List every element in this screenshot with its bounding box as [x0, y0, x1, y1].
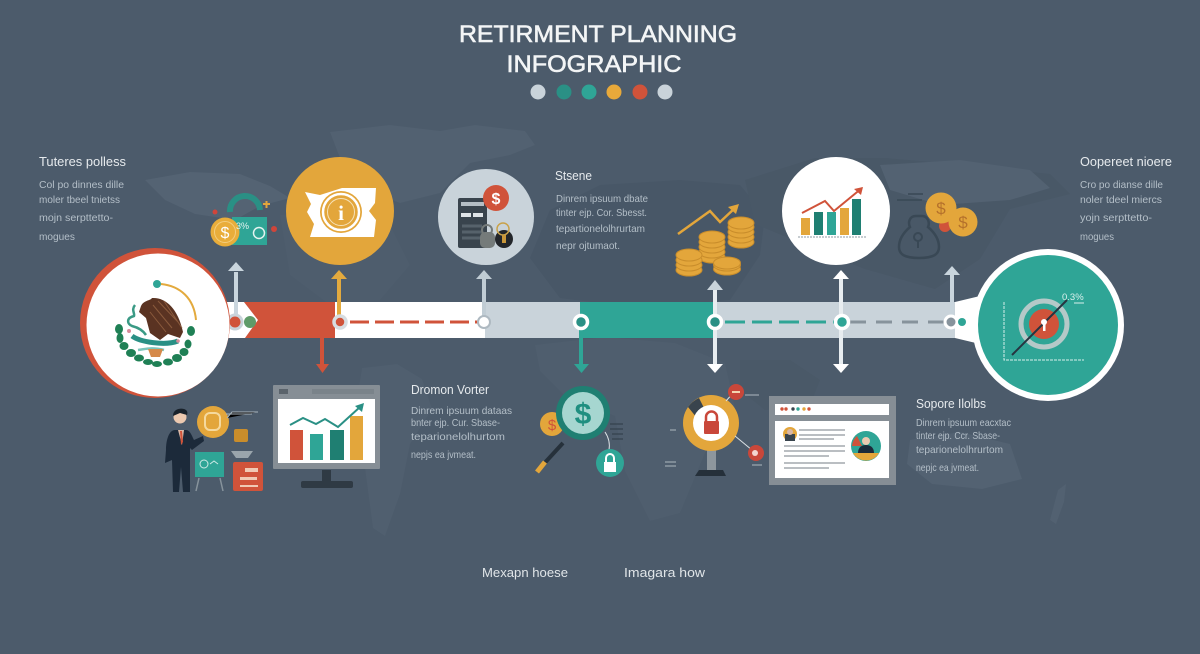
text block: top left — [39, 155, 126, 243]
text block: lower left: teparionelolhurtom — [411, 431, 505, 443]
teal target circle — [972, 249, 1124, 401]
text block: top middle: Dinrem ipsuum dbate — [556, 193, 648, 205]
text block: lower left: Dinrem ipsuum dataas — [411, 405, 512, 417]
text block: top middle: Stsene — [555, 169, 592, 183]
grey calculator circle: $ — [492, 191, 501, 208]
icon: money and gauge: 3% — [236, 221, 249, 231]
grey calculator circle — [438, 169, 534, 265]
text block: top right: Oopereet nioere — [1080, 155, 1172, 169]
orange info circle — [286, 157, 394, 265]
icon: money and gauge — [210, 196, 277, 246]
orange info circle: i — [338, 201, 344, 225]
icon: monitor with bar chart — [273, 385, 380, 488]
eagle — [139, 298, 183, 340]
text block: lower left: Dromon Vorter — [411, 383, 489, 397]
timeline band — [220, 296, 980, 344]
title colour dots — [530, 84, 672, 100]
text block: lower right: teparionelolhrurtom — [916, 444, 1003, 456]
icon: magnifier with lock: $ — [548, 417, 557, 434]
text block: top right: Cro po dianse dille — [1080, 179, 1163, 191]
title: INFOGRAPHIC — [506, 51, 682, 78]
text block: lower right: Sopore Ilolbs — [916, 397, 986, 411]
title: RETIRMENT PLANNING — [459, 21, 737, 48]
text block: lower right: Dinrem ipsuum eacxtac — [916, 417, 1011, 429]
text block: top left: mogues — [39, 231, 75, 243]
icon: padlock gauge on stand — [665, 384, 764, 476]
bottom labels: Mexapn hoese — [482, 566, 568, 580]
text block: lower right: nepjc ea jvmeat. — [916, 462, 979, 474]
text block: top middle — [555, 169, 648, 252]
flag emblem circle — [80, 248, 230, 398]
icon: money bag with coins: $ — [936, 199, 946, 218]
icon: money bag with coins — [897, 192, 978, 258]
text block: top left: Col po dinnes dille — [39, 179, 124, 191]
text block: lower left: nepjs ea jvmeat. — [411, 449, 476, 461]
browser window panel — [769, 396, 896, 485]
teal target circle: 0.3% — [1062, 292, 1084, 303]
wreath — [115, 324, 195, 367]
text block: top right: mogues — [1080, 231, 1114, 243]
world map background — [145, 125, 1070, 536]
icon: magnifier with lock — [537, 386, 624, 477]
text block: lower right: tinter ejp. Ccr. Sbase- — [916, 430, 1000, 442]
icon: magnifier with lock: $ — [575, 398, 592, 431]
text block: lower right — [916, 397, 1011, 474]
text block: top left: Tuteres polless — [39, 155, 126, 169]
icon: money and gauge: $ — [221, 225, 230, 242]
text block: top left: mojn serpttetto- — [39, 212, 114, 224]
arrows — [228, 262, 960, 373]
text block: top right — [1080, 155, 1172, 243]
text block: top middle: tepartionelolhrurtam — [556, 223, 645, 235]
bottom labels: Imagara how — [624, 566, 706, 580]
text block: lower left: bnter ejp. Cur. Sbase- — [411, 417, 500, 429]
timeline nodes — [228, 315, 966, 329]
icon: money bag with coins: $ — [958, 213, 968, 232]
title — [459, 21, 737, 78]
text block: lower left — [411, 383, 512, 461]
text block: top middle: nepr ojtumaot. — [556, 240, 620, 252]
text block: top left: moler tbeel tnietss — [39, 194, 120, 206]
icon: businessman with charts — [165, 406, 263, 492]
bottom labels — [482, 566, 706, 580]
white chart circle — [782, 157, 890, 265]
icon: gold coin stacks with arrow — [676, 204, 754, 276]
text block: top right: noler tdeel miercs — [1080, 194, 1162, 206]
text block: top middle: tinter ejp. Cor. Sbesst. — [556, 207, 647, 219]
text block: top right: yojn serpttetto- — [1080, 212, 1153, 224]
